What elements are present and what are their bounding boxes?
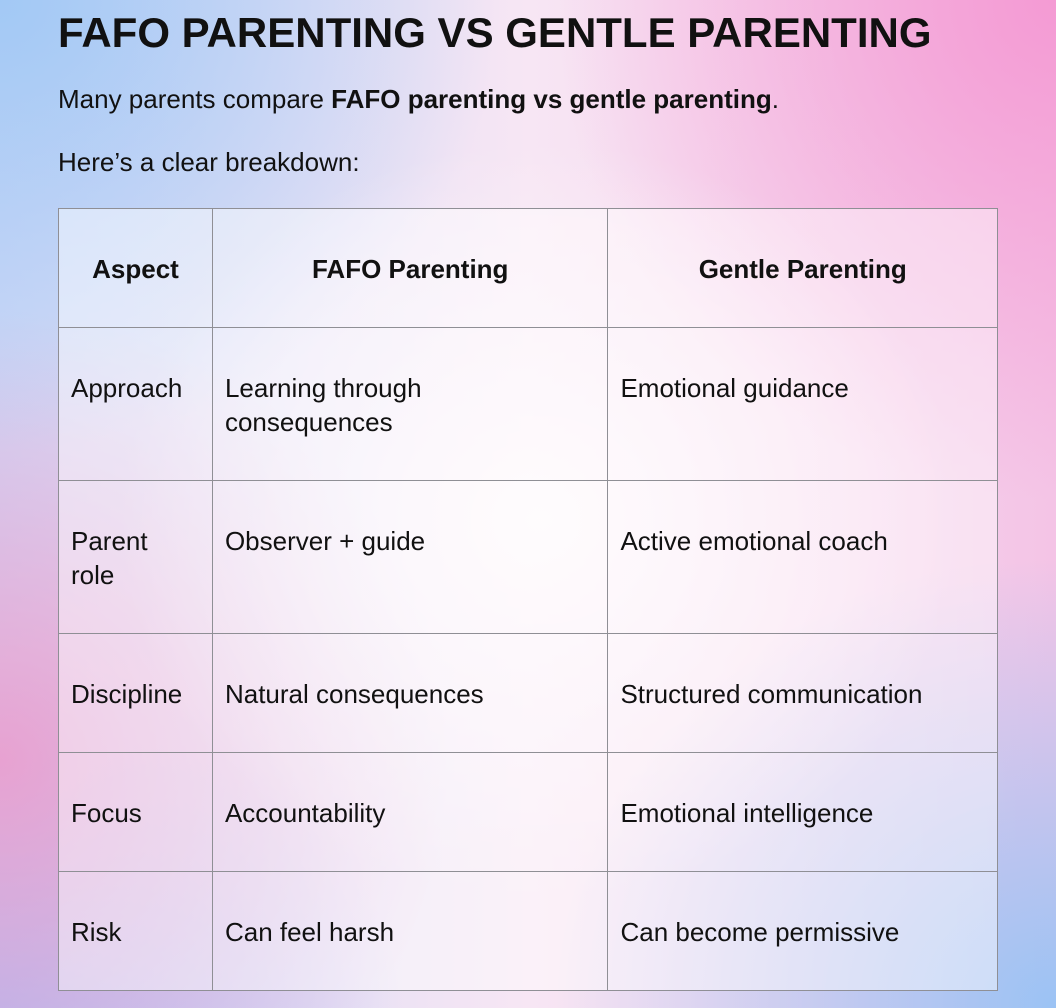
comparison table: Focus — [71, 798, 142, 828]
comparison table: FAFO Parenting — [312, 254, 508, 284]
comparison table: Discipline — [71, 679, 182, 709]
comparison table: Natural consequences — [225, 679, 484, 709]
comparison table: Emotional guidance — [620, 373, 849, 403]
comparison table: role — [71, 560, 114, 590]
comparison table: Accountability — [225, 798, 385, 828]
comparison table: Parent — [71, 526, 148, 556]
comparison table: Can feel harsh — [225, 917, 394, 947]
comparison table: Observer + guide — [225, 526, 425, 556]
comparison table — [58, 208, 998, 991]
comparison table: Active emotional coach — [620, 526, 888, 556]
comparison table: Can become permissive — [620, 917, 899, 947]
title: FAFO PARENTING VS GENTLE PARENTING — [58, 9, 932, 56]
comparison table: Gentle Parenting — [699, 254, 907, 284]
comparison table: Emotional intelligence — [620, 798, 873, 828]
comparison table: Learning through — [225, 373, 422, 403]
comparison table: Structured communication — [620, 679, 922, 709]
comparison table: Aspect — [92, 254, 179, 284]
comparison table: consequences — [225, 407, 393, 437]
intro text: Many parents compare FAFO parenting vs gentle parenting. — [58, 84, 779, 114]
comparison table: Risk — [71, 917, 122, 947]
subtitle text: Here’s a clear breakdown: — [58, 147, 360, 177]
comparison table: Approach — [71, 373, 182, 403]
